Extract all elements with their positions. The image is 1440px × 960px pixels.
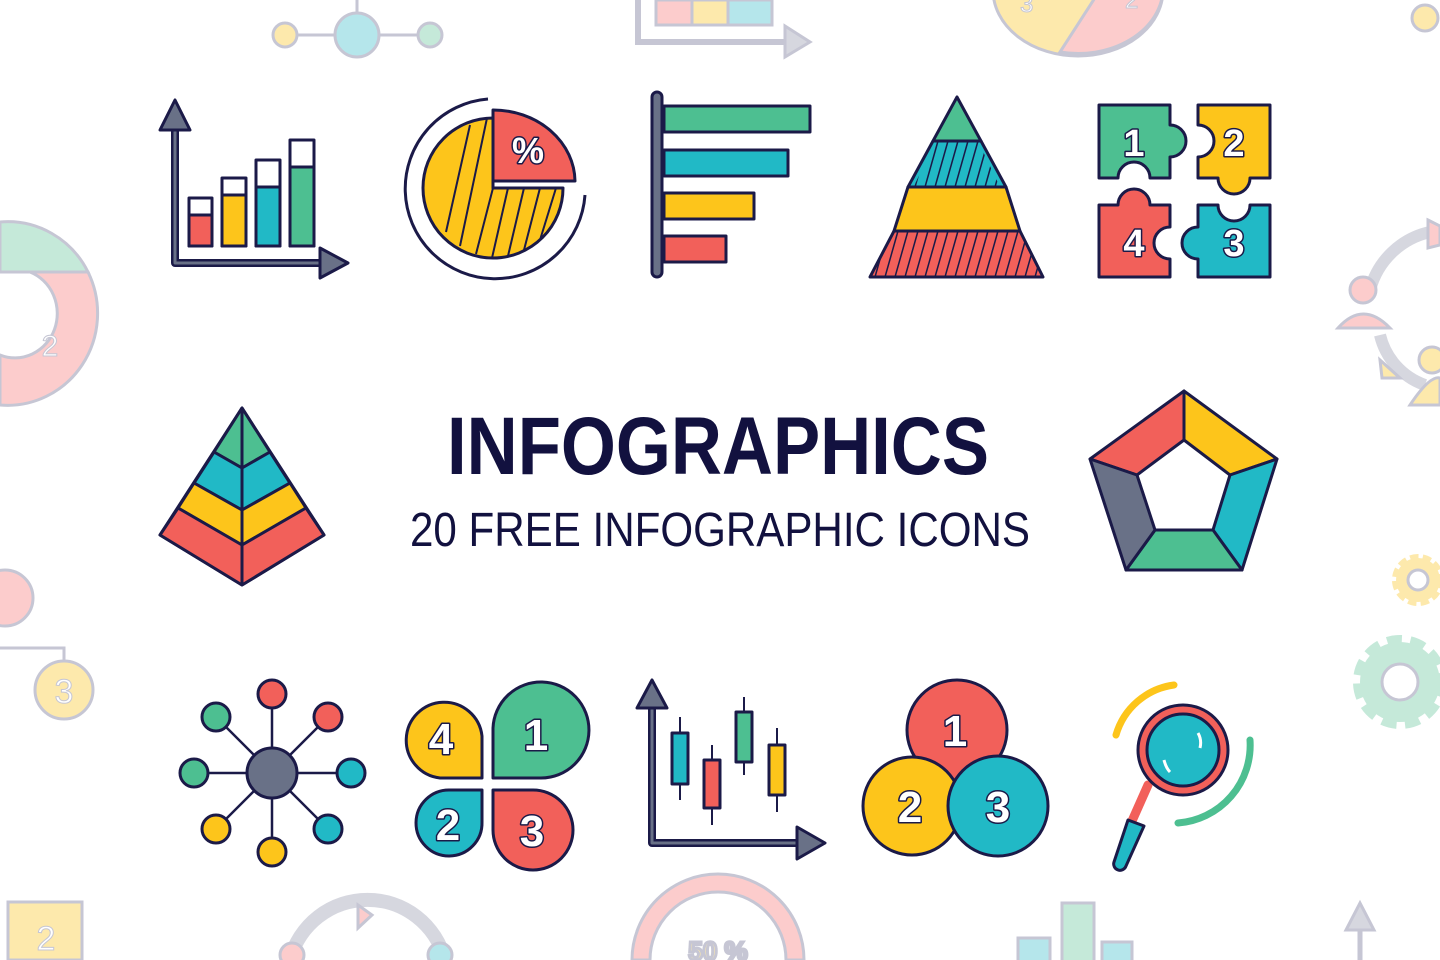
icon: venn <box>863 680 1048 856</box>
icon: horizontal bars <box>652 92 810 277</box>
icon: clover: 4 <box>429 715 454 764</box>
icon: venn: 2 <box>898 783 922 832</box>
icon: venn: 1 <box>943 707 967 756</box>
icon: clover: 1 <box>524 711 548 760</box>
faded: top bar chart <box>638 0 810 57</box>
icon: triangle pyramid <box>865 97 1048 277</box>
icon: pie chart <box>405 99 585 279</box>
faded: top node chain <box>273 0 442 57</box>
faded: left circles: 3 <box>55 673 73 711</box>
icon: pie chart: % <box>512 130 544 171</box>
icon: puzzle <box>1099 105 1270 277</box>
faded: bottom arrow <box>1346 903 1374 960</box>
icon: bar chart <box>160 100 348 278</box>
icon: 3d pyramid <box>160 408 324 585</box>
faded: top pie <box>993 0 1163 56</box>
main icons <box>160 92 1277 870</box>
faded: bottom arc <box>280 900 452 960</box>
icon: network <box>180 680 365 866</box>
faded: left donut <box>0 222 98 405</box>
faded: top right dot <box>1412 5 1438 31</box>
icon: clover <box>406 682 589 870</box>
faded: right gears <box>1360 558 1440 722</box>
icon: puzzle: 3 <box>1223 223 1245 265</box>
faded: left donut: 2 <box>42 330 58 363</box>
icon: candlestick <box>637 680 825 859</box>
icon: clover: 3 <box>520 807 544 856</box>
title: INFOGRAPHICS <box>447 401 989 492</box>
faded: right cycle <box>1338 220 1440 405</box>
icon: clover: 2 <box>436 801 460 850</box>
icon: pentagon <box>1090 391 1277 570</box>
faded: bottom puzzle: 2 <box>37 920 55 958</box>
icon: venn: 3 <box>986 783 1010 832</box>
subtitle: 20 FREE INFOGRAPHIC ICONS <box>410 504 1030 557</box>
faded: bottom puzzle <box>8 902 82 960</box>
icon: magnifier <box>1114 685 1250 870</box>
icon: puzzle: 4 <box>1123 223 1145 265</box>
icon: puzzle: 2 <box>1223 123 1245 165</box>
icon: puzzle: 1 <box>1123 123 1145 165</box>
faded: left circles <box>0 570 93 719</box>
faded: bottom bars <box>1018 903 1132 960</box>
faded: bottom 50% gauge <box>632 874 804 960</box>
